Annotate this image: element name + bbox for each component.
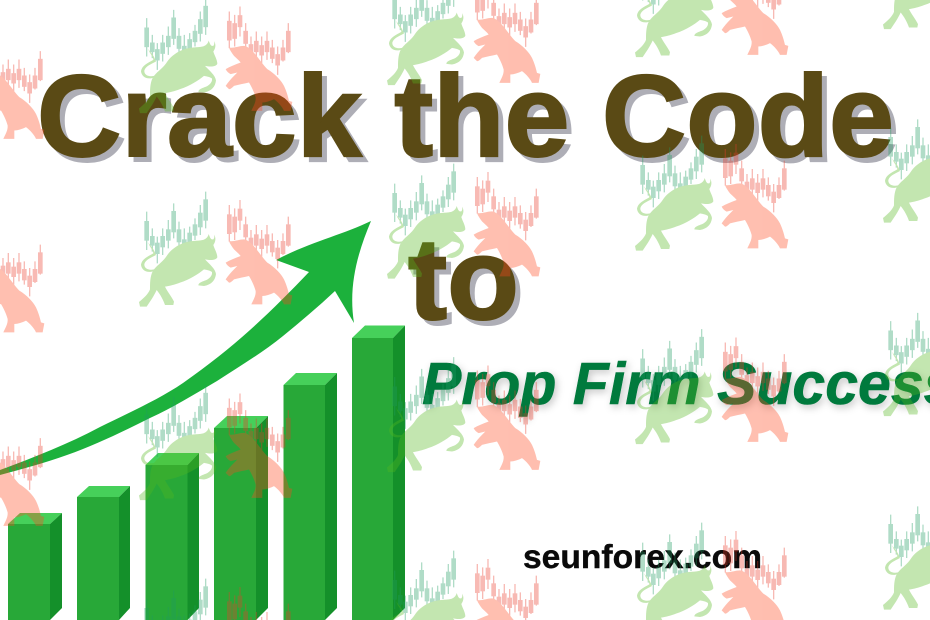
bar 4 xyxy=(214,416,268,620)
bar 3 xyxy=(146,453,199,620)
upward growth arrow xyxy=(0,221,371,475)
website label: seunforex.com xyxy=(523,538,762,575)
bar chart xyxy=(8,326,405,620)
bar 2 xyxy=(77,486,130,620)
bar 5 xyxy=(284,373,337,620)
bar 1 xyxy=(8,513,62,620)
bar 6 xyxy=(352,326,405,620)
title: Crack the Code: Crack the Code xyxy=(37,51,894,181)
title: to: to xyxy=(408,214,519,344)
